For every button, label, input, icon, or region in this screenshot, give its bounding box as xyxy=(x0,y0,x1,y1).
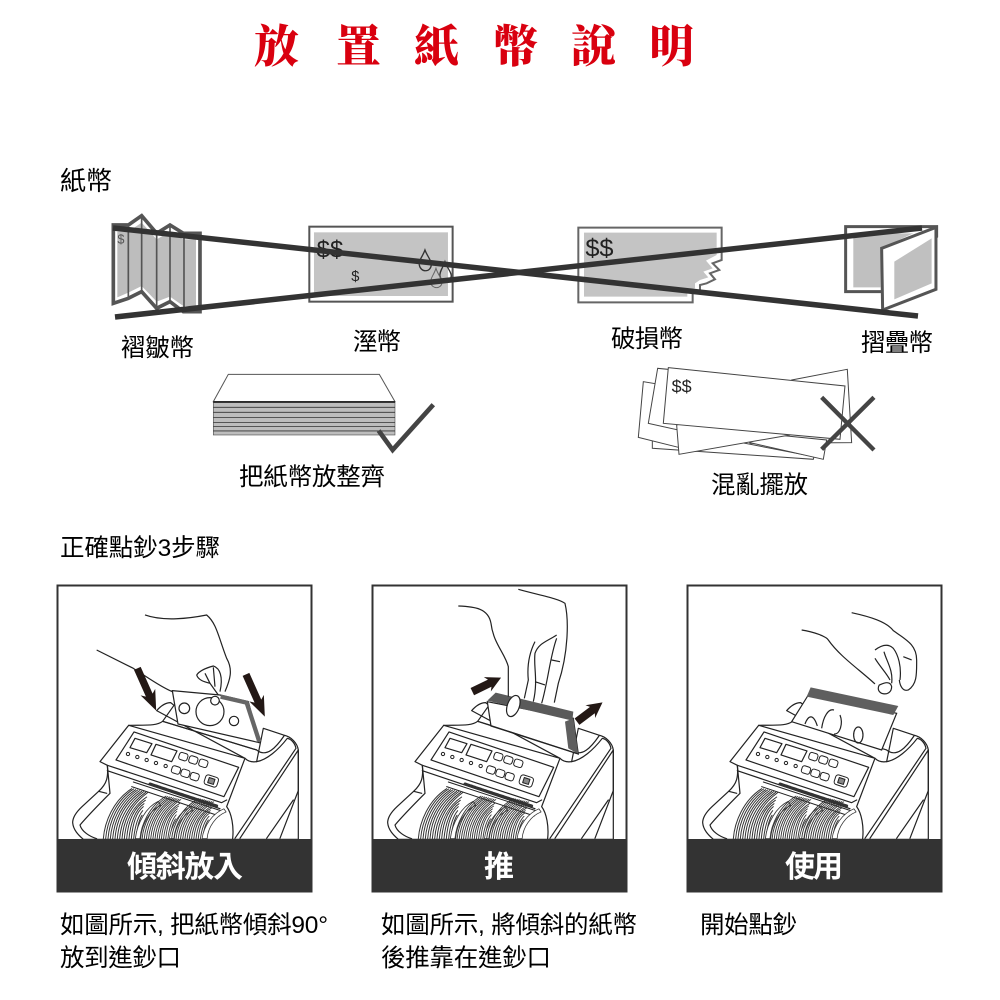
cross-out lines xyxy=(113,228,922,317)
illustration: machine counting notes xyxy=(703,613,928,839)
band: step 3 label xyxy=(687,839,942,892)
icon: wet note: $$ xyxy=(317,236,343,263)
caption: step 3: 開始點鈔 xyxy=(700,911,797,939)
caption: step 1 xyxy=(60,911,328,972)
panel: step 3 use xyxy=(687,586,942,892)
label: wrinkled: 褶皺幣 xyxy=(121,334,194,362)
label: messy: 混亂擺放 xyxy=(711,471,808,499)
title: 放置紙幣說明 xyxy=(254,10,694,75)
label: torn: 破損幣 xyxy=(611,325,683,353)
label: align notes: 把紙幣放整齊 xyxy=(239,463,385,491)
icon: neat stack with check xyxy=(213,374,433,450)
band: step 2 label: 推 xyxy=(484,851,514,884)
caption: step 2: 後推靠在進鈔口 xyxy=(381,944,551,972)
icon: torn note xyxy=(578,228,722,302)
icon: wrinkled note xyxy=(113,216,200,312)
icon: messy notes with cross: $$ xyxy=(672,376,692,396)
icon: wet note xyxy=(309,227,453,302)
band: step 1 label xyxy=(57,839,312,892)
caption: step 1: 放到進鈔口 xyxy=(60,944,181,972)
heading: banknotes: 紙幣 xyxy=(60,166,112,196)
illustration: machine with hand tilting notes xyxy=(73,615,298,839)
label: folded: 摺疊幣 xyxy=(861,329,933,357)
icon: torn note: $$ xyxy=(585,235,614,263)
bad notes illustration group xyxy=(113,216,937,317)
icon: folded note xyxy=(846,227,937,310)
caption: step 2: 如圖所示, 將傾斜的紙幣 xyxy=(381,911,637,939)
caption: step 1: 如圖所示, 把紙幣傾斜90° xyxy=(60,911,328,939)
band: step 1 label: 傾斜放入 xyxy=(127,851,243,884)
icon: messy notes with cross xyxy=(638,368,874,459)
band: step 2 label xyxy=(372,839,627,892)
icon: wrinkled note: $ xyxy=(117,232,124,246)
panel: step 2 push xyxy=(372,586,627,892)
illustration: machine with hand pushing notes xyxy=(388,589,613,839)
band: step 3 label: 使用 xyxy=(785,851,843,884)
caption: step 2 xyxy=(381,911,637,972)
label: wet: 溼幣 xyxy=(353,328,401,356)
panel: step 1 tilt in xyxy=(57,586,312,892)
heading: three steps: 正確點鈔3步驟 xyxy=(60,534,220,562)
icon: wet note: $ xyxy=(351,269,359,285)
